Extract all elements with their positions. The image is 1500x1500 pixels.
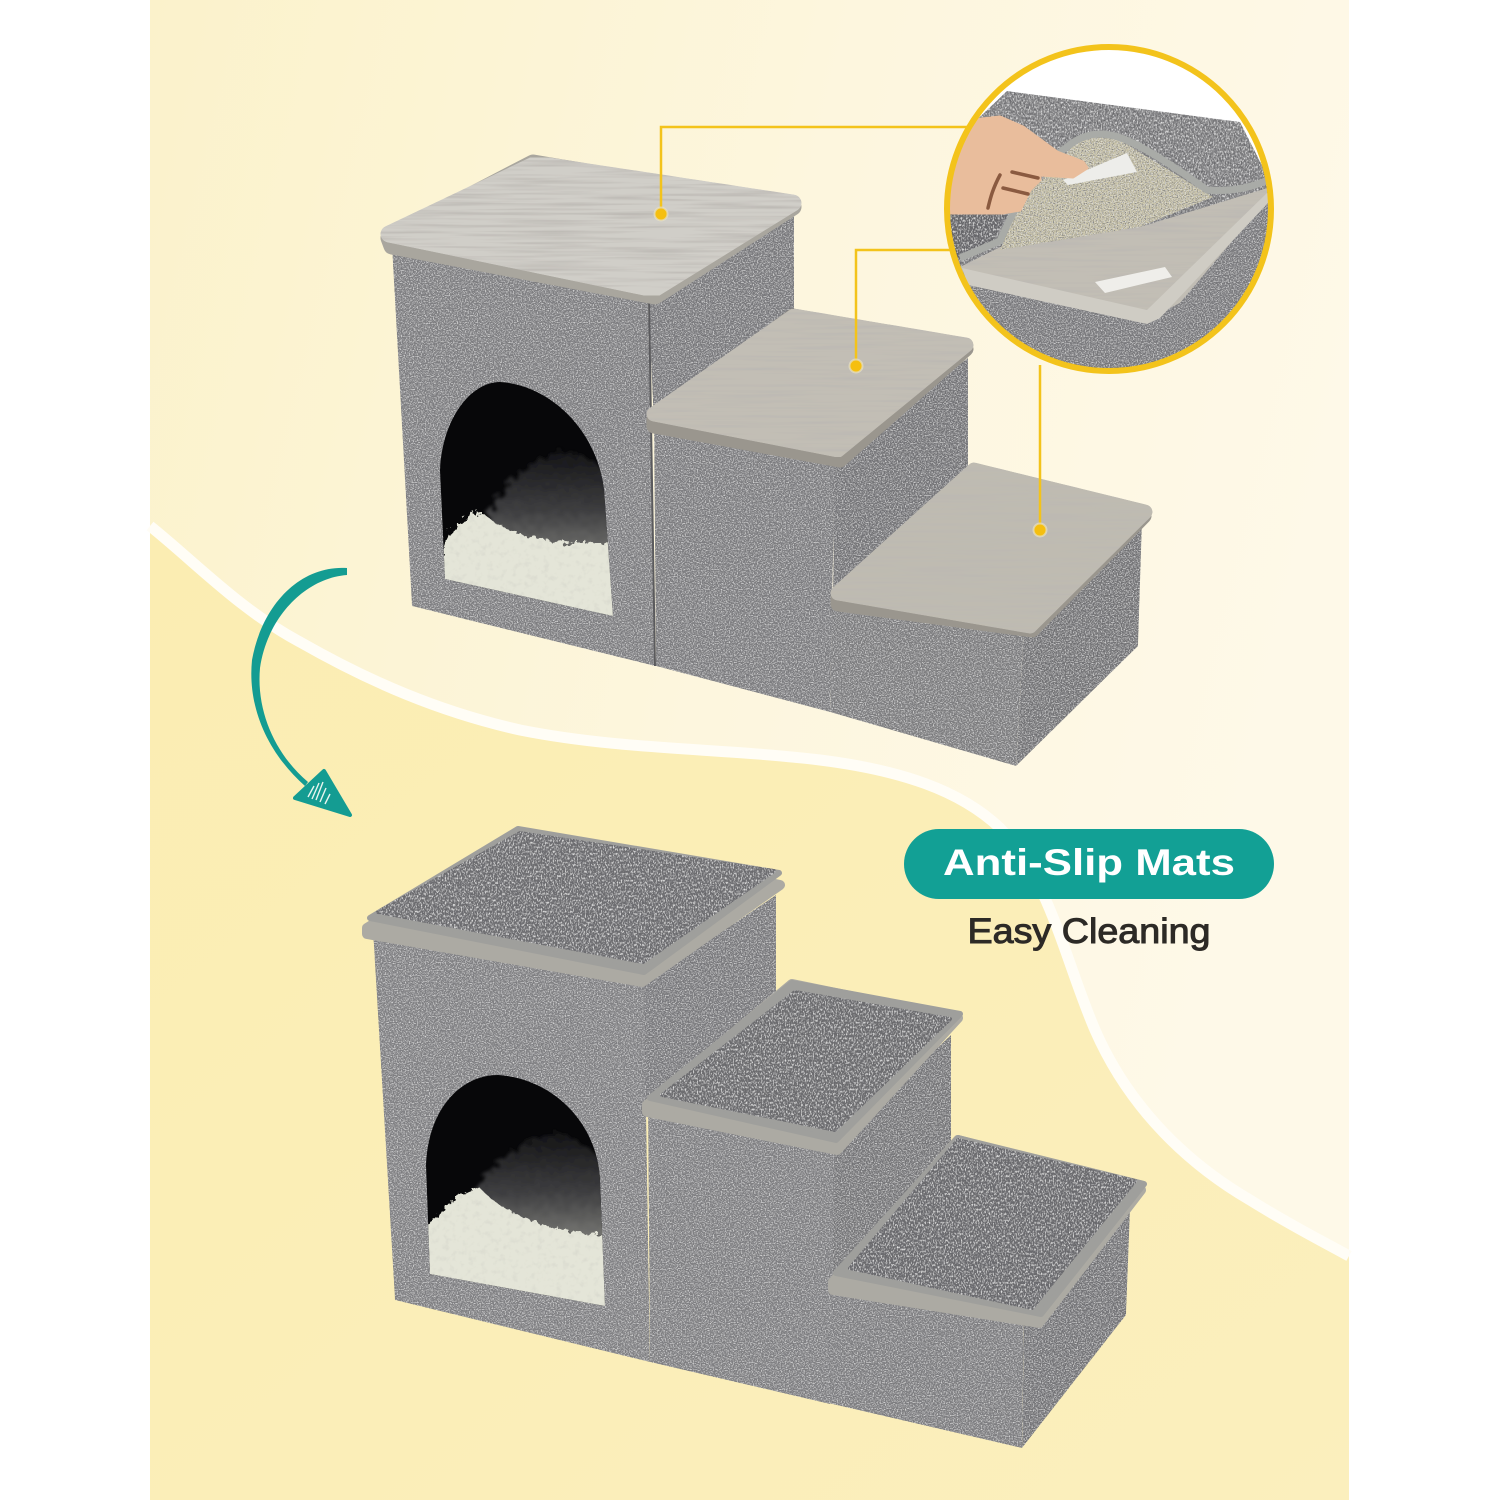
leader to small lid (1039, 365, 1041, 530)
callout circle: mat peeling off lid (945, 47, 1278, 380)
small step box (828, 1138, 1144, 1448)
panel: bottom product with anti-slip mats (367, 829, 1144, 1448)
subheading: Easy Cleaning: Easy Cleaning (968, 912, 1210, 951)
velcro strip on mat (1063, 153, 1137, 185)
light cushion front (428, 1188, 605, 1306)
wooden lid middle (654, 316, 966, 460)
background panel: yellow lower wave (150, 526, 1349, 1500)
small step box (830, 470, 1145, 766)
leader to middle lid (856, 250, 955, 366)
doorway with cushion (425, 1075, 612, 1315)
callout gold ring (947, 47, 1271, 371)
mat left remainder (950, 214, 1008, 258)
velcro strip on lid (1095, 267, 1172, 293)
lid front edge (962, 192, 1268, 324)
wave white edge (150, 526, 1349, 1256)
background panel: cream upper area (150, 0, 1349, 1500)
middle step box (654, 316, 968, 712)
middle mat lid (647, 983, 960, 1150)
large mat lid (367, 829, 780, 982)
hand shadow between fingers (988, 172, 1038, 208)
hand (948, 117, 1087, 213)
underlay backing (1000, 135, 1213, 250)
large box with doorway (367, 829, 780, 1362)
panel: top product with wooden lids (389, 163, 1145, 766)
linen box side (963, 203, 1268, 368)
dot on top lid (654, 208, 668, 220)
arrowhead (295, 771, 350, 815)
wooden lid large (389, 163, 793, 296)
arrowhead hatching (308, 782, 330, 804)
wooden lid small (838, 470, 1145, 630)
doorway with cushion (440, 382, 620, 625)
dot on small lid (1034, 524, 1046, 536)
middle step box (647, 983, 960, 1404)
arrow shaft (251, 568, 347, 786)
dark fuzzy cushion back (472, 1134, 602, 1236)
curved teal arrow (251, 568, 350, 815)
corner seam (648, 300, 656, 666)
light cushion front (443, 509, 613, 616)
dot on middle lid (850, 360, 862, 372)
mat binding edge (960, 134, 1268, 258)
dark fuzzy cushion back (484, 452, 609, 558)
wooden lid surface (960, 188, 1267, 320)
callout leader lines and dots (654, 127, 1046, 536)
carpet mat back (958, 91, 1267, 272)
badge: Anti-Slip Mats: Anti-Slip Mats (943, 842, 1235, 883)
small mat lid (833, 1138, 1144, 1323)
leader to top lid (661, 127, 980, 214)
large box with doorway (389, 163, 794, 666)
badge: Anti-Slip Mats (904, 829, 1274, 899)
